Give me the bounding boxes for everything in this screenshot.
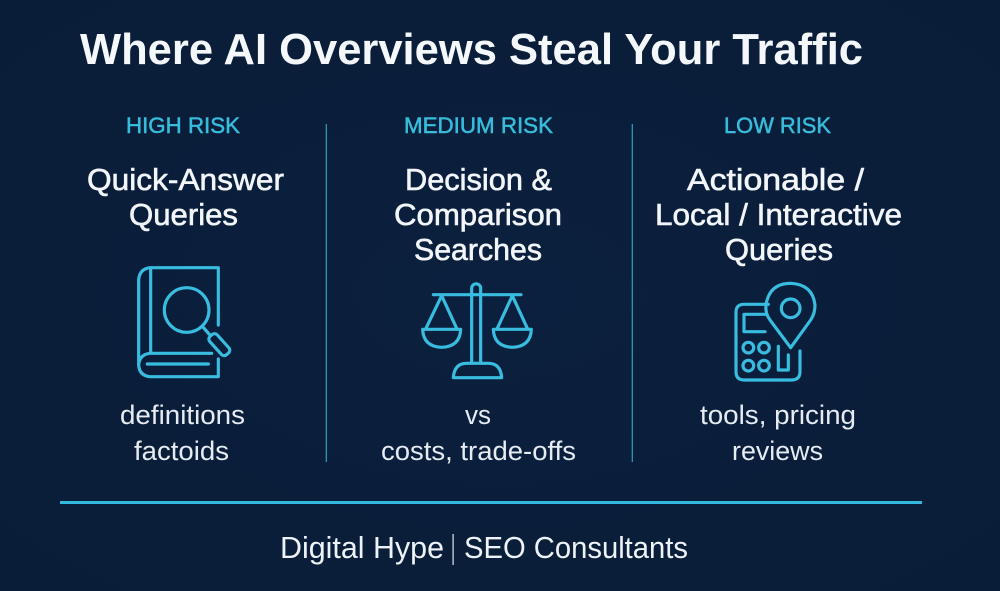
footer: brand line: SEO Consultants [464, 530, 688, 565]
heading: decision and comparison searches: Searches [414, 232, 542, 267]
panel: high risk [87, 113, 284, 466]
examples: definitions, factoids: definitions [120, 400, 245, 430]
icon: book with magnifying glass [139, 268, 231, 377]
heading: decision and comparison searches: Comparison [394, 197, 562, 232]
risk label: medium: MEDIUM RISK [404, 113, 553, 138]
icon: calculator with location pin [736, 283, 815, 380]
heading: decision and comparison searches: Decision & [405, 162, 552, 197]
examples: definitions, factoids: factoids [134, 436, 229, 466]
risk label: low: LOW RISK [724, 113, 831, 138]
footer: brand line [280, 530, 688, 565]
footer: brand line: Digital Hype [280, 530, 444, 565]
heading: quick-answer queries: Quick-Answer [87, 162, 284, 197]
examples: vs, costs and trade-offs: costs, trade-offs [381, 436, 576, 466]
examples: definitions, factoids [120, 400, 245, 466]
examples: vs, costs and trade-offs: vs [465, 400, 491, 430]
risk label: high: HIGH RISK [126, 113, 240, 138]
panel: low risk [655, 113, 902, 466]
heading: decision and comparison searches [394, 162, 562, 267]
heading: quick-answer queries: Queries [129, 197, 238, 232]
heading: actionable local interactive queries: Local / Interactive [655, 197, 902, 232]
heading: actionable local interactive queries: Queries [725, 232, 833, 267]
title: Where AI Overviews Steal Your Traffic [80, 25, 863, 74]
examples: vs, costs and trade-offs [381, 400, 576, 466]
heading: quick-answer queries [87, 162, 284, 232]
examples: tools, pricing, reviews: tools, pricing [700, 400, 856, 430]
heading: actionable local interactive queries [655, 162, 902, 267]
heading: actionable local interactive queries: Actionable / [687, 162, 864, 197]
icon: balance scales [423, 284, 531, 378]
panel: medium risk [381, 113, 576, 466]
examples: tools, pricing, reviews [700, 400, 856, 466]
examples: tools, pricing, reviews: reviews [732, 436, 823, 466]
